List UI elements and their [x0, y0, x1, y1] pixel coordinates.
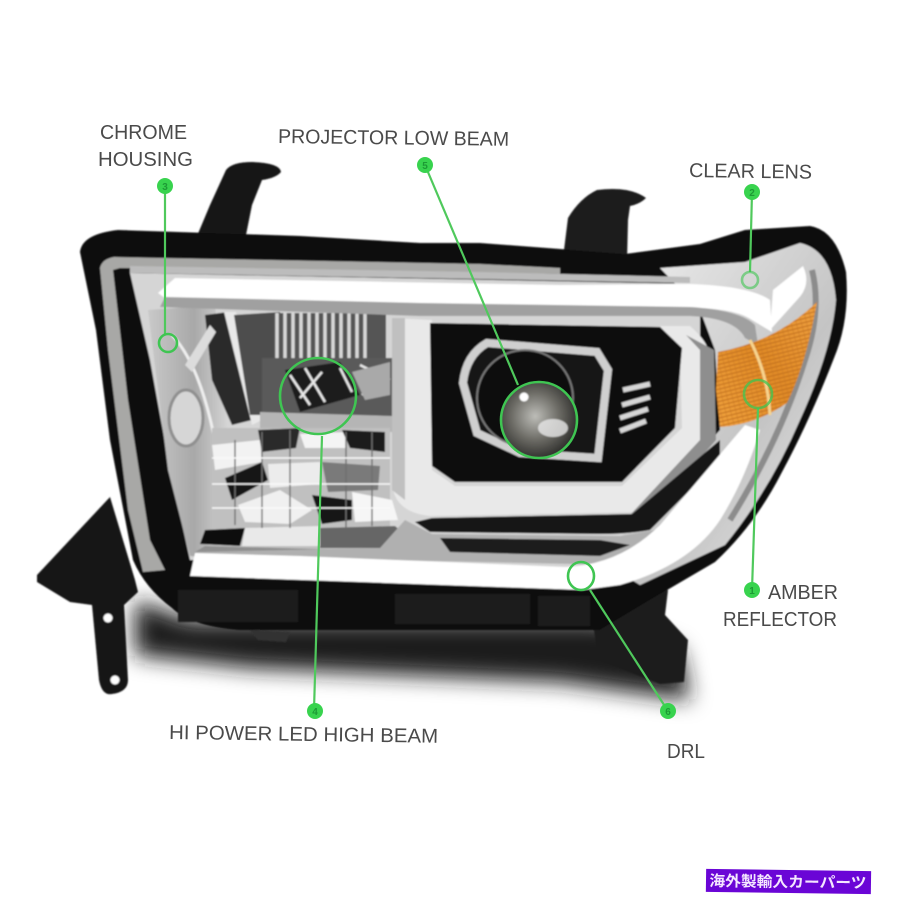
white DRL lower bar: [190, 425, 760, 590]
label: REFLECTOR: [723, 609, 837, 631]
label: DRL: [667, 741, 705, 763]
label: [98, 122, 193, 171]
small round reflector: [169, 390, 203, 446]
leader: [314, 436, 322, 710]
chrome strip below top bar: [160, 297, 758, 345]
target ring: [744, 380, 772, 408]
label: CLEAR LENS: [689, 160, 812, 184]
marker: 5: [422, 161, 428, 172]
leader: [425, 165, 518, 385]
projector lens: [501, 382, 577, 458]
label: CHROME: [100, 122, 187, 144]
right mounting tab: [564, 189, 646, 262]
left reflector bowl: [148, 305, 240, 560]
marker: [660, 703, 676, 719]
label: HOUSING: [98, 149, 193, 171]
callout 4: hi power LED high beam: [169, 358, 438, 748]
LED high beam module: [260, 358, 392, 432]
inner chrome edge right: [770, 266, 806, 330]
leader: [750, 192, 752, 272]
callout 2: clear lens: [689, 160, 812, 288]
right chrome bezel strip: [630, 335, 716, 515]
marker: [417, 157, 433, 173]
marker: [744, 582, 760, 598]
heat sink fins: [274, 313, 386, 363]
marker: 4: [312, 707, 318, 718]
projector chrome bezel: [463, 343, 608, 458]
vent slots: [620, 384, 650, 431]
white U-shaped DRL light pipe: [392, 318, 708, 516]
lower black band under bar: [415, 440, 720, 534]
marker: [307, 703, 323, 719]
left mounting tab: [197, 162, 281, 240]
marker: 2: [749, 188, 755, 199]
leader: [752, 408, 758, 590]
label: [723, 582, 838, 631]
callout 5: projector low beam: [278, 126, 577, 458]
lower left mounting bracket: [37, 497, 138, 694]
marker: 6: [665, 707, 671, 718]
callout 1: amber reflector: [723, 380, 838, 631]
label: AMBER: [768, 582, 838, 604]
crystal reflector facets: [195, 428, 420, 558]
target ring: [568, 562, 594, 590]
lower housing panels: [178, 590, 590, 626]
amber reflector: [716, 302, 817, 427]
lower right mounting bracket: [590, 590, 688, 684]
leader: [164, 186, 166, 334]
lens interior base: [130, 273, 700, 570]
target ring: [280, 358, 356, 434]
marker: 1: [749, 586, 755, 597]
ground shadow: [135, 600, 690, 700]
watermark badge: [706, 869, 871, 894]
leader: [590, 590, 668, 711]
projector black panel: [430, 323, 682, 482]
target ring: [159, 334, 177, 352]
label: PROJECTOR LOW BEAM: [278, 126, 509, 151]
marker: 3: [162, 182, 168, 193]
outer gray frame band: [100, 257, 560, 572]
bracket holes: [104, 614, 120, 684]
black housing: [80, 226, 847, 630]
headlight illustration: [37, 162, 847, 700]
dark reflector blocks: [205, 312, 252, 425]
callout 3: chrome housing: [98, 122, 193, 352]
right clear lens area: [600, 243, 836, 585]
callout 6: DRL: [568, 562, 705, 763]
projector inner well: [477, 350, 573, 446]
white DRL top bar: [158, 278, 772, 332]
chrome lower trim: [195, 440, 738, 565]
target ring: [501, 382, 577, 458]
label: HI POWER LED HIGH BEAM: [169, 722, 438, 748]
marker: [157, 178, 173, 194]
watermark badge: 海外製輸入カーパーツ: [709, 872, 867, 892]
bottom clips: [250, 630, 290, 642]
target ring: [742, 272, 758, 288]
